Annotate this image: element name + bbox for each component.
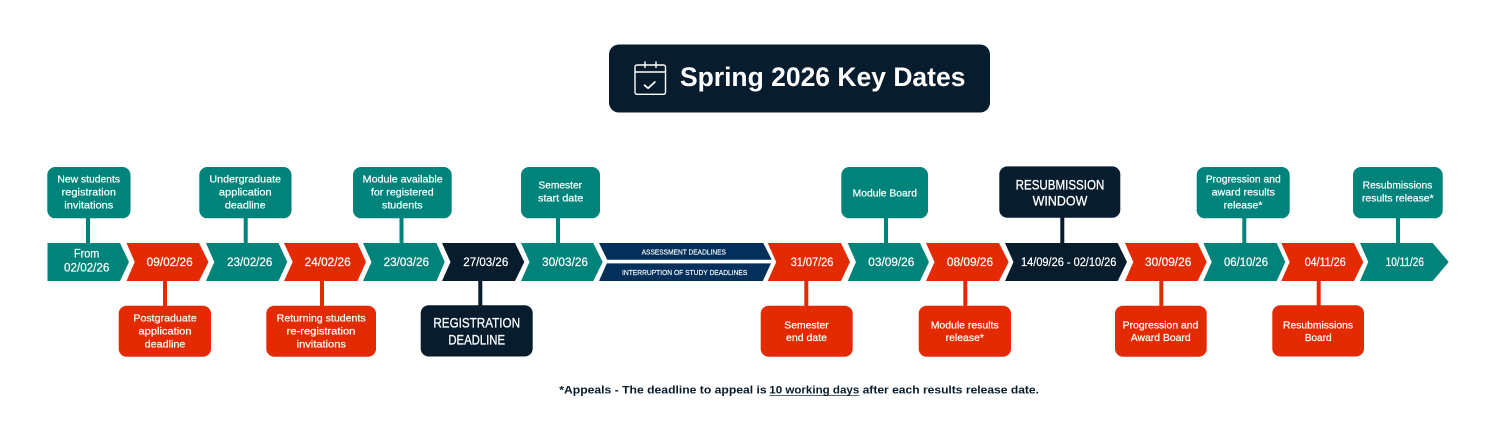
- footnote: appeals deadline: *Appeals - The deadline to appeal is: [559, 384, 767, 396]
- milestone: returning students re-registration invitations: 24/02/26: [305, 257, 351, 269]
- milestone: module results release: Module results: [931, 319, 999, 331]
- milestone: registration deadline: DEADLINE: [448, 331, 505, 347]
- milestone: undergraduate application deadline: deadline: [225, 199, 266, 211]
- milestone: resubmission window: RESUBMISSION: [1016, 176, 1104, 192]
- milestone: semester end date: Semester: [784, 319, 829, 331]
- milestone: undergraduate application deadline: [199, 167, 292, 281]
- assessment and interruption of study deadline bands: [599, 243, 772, 281]
- milestone: postgraduate application deadline: Postgraduate: [133, 313, 197, 325]
- milestone: progression and award board: [1115, 243, 1207, 357]
- milestone: progression and award results release: [1197, 167, 1290, 281]
- milestone: module results release: release*: [946, 332, 984, 344]
- milestone: resubmissions results release: 10/11/26: [1386, 257, 1424, 269]
- milestone: module board: 03/09/26: [868, 257, 914, 269]
- milestone: semester start date: Semester: [538, 180, 583, 192]
- band: interruption of study deadlines: [599, 263, 771, 281]
- milestone: module available for registered students: students: [382, 199, 423, 211]
- milestone: new students registration invitations: invitations: [64, 199, 113, 211]
- milestone: postgraduate application deadline: deadline: [145, 338, 186, 350]
- milestone: resubmissions board: [1272, 243, 1364, 356]
- milestone: resubmissions results release: results release*: [1362, 192, 1434, 204]
- title text: Spring 2026 Key Dates: [680, 62, 965, 92]
- milestone: postgraduate application deadline: [119, 243, 211, 357]
- milestone: module board: [841, 167, 929, 281]
- band: assessment deadlines: ASSESSMENT DEADLINES: [642, 247, 726, 256]
- milestone: resubmissions results release: [1353, 167, 1449, 281]
- milestone: undergraduate application deadline: Undergraduate: [209, 174, 281, 186]
- milestone: semester start date: [521, 167, 603, 281]
- milestone: resubmissions board: Board: [1305, 332, 1332, 344]
- milestone: returning students re-registration invitations: Returning students: [277, 313, 366, 325]
- milestone: registration deadline: [421, 243, 533, 356]
- footnote: appeals deadline: [559, 384, 1039, 396]
- milestone: progression and award results release: release*: [1224, 199, 1262, 211]
- milestone: postgraduate application deadline: application: [138, 326, 192, 338]
- milestone: semester end date: 31/07/26: [791, 257, 833, 269]
- milestone: module available for registered students: for registered: [371, 186, 434, 198]
- milestone: progression and award board: 30/09/26: [1145, 257, 1191, 269]
- title banner: [609, 44, 990, 112]
- milestone: new students registration invitations: [47, 167, 130, 281]
- milestone: resubmission window: 14/09/26 - 02/10/26: [1021, 257, 1116, 269]
- icon: calendar with check mark: [635, 62, 666, 94]
- band: assessment deadlines: [599, 243, 772, 260]
- milestone: progression and award board: Progression and: [1123, 319, 1199, 331]
- milestone: semester start date: 30/03/26: [542, 257, 588, 269]
- milestone: postgraduate application deadline: 09/02/26: [147, 257, 193, 269]
- milestone: semester start date: start date: [538, 193, 584, 205]
- milestone: module available for registered students: 23/03/26: [384, 257, 429, 269]
- milestone: resubmissions results release: Resubmissions: [1363, 180, 1432, 192]
- milestone: undergraduate application deadline: application: [219, 186, 272, 198]
- milestone: progression and award board: Award Board: [1131, 332, 1191, 344]
- milestone: module board: Module Board: [853, 187, 917, 199]
- milestone: returning students re-registration invitations: re-registration: [287, 326, 356, 338]
- milestone: semester end date: [761, 243, 853, 357]
- footnote: appeals deadline: 10 working days: [769, 384, 859, 396]
- milestone: resubmission window: WINDOW: [1033, 193, 1088, 209]
- milestone: returning students re-registration invitations: invitations: [297, 338, 346, 350]
- milestone: new students registration invitations: 02/02/26: [64, 263, 109, 275]
- milestone: module available for registered students: Module available: [363, 174, 443, 186]
- milestone: registration deadline: 27/03/26: [463, 257, 508, 269]
- milestone: module results release: 08/09/26: [947, 257, 993, 269]
- footnote: appeals deadline: after each results release date.: [863, 384, 1039, 396]
- milestone: new students registration invitations: New students: [57, 174, 120, 186]
- milestone: returning students re-registration invitations: [266, 243, 376, 357]
- milestone: registration deadline: REGISTRATION: [433, 314, 520, 330]
- milestone: module results release: [919, 243, 1011, 357]
- milestone: progression and award results release: award results: [1212, 186, 1275, 198]
- milestone: new students registration invitations: From: [74, 249, 99, 261]
- milestone: resubmissions board: 04/11/26: [1305, 257, 1346, 269]
- milestone: module available for registered students: [353, 167, 452, 281]
- band: interruption of study deadlines: INTERRUPTION OF STUDY DEADLINES: [622, 268, 747, 277]
- milestone: undergraduate application deadline: 23/02/26: [227, 257, 272, 269]
- milestone: resubmission window: [999, 166, 1127, 281]
- milestone: semester end date: end date: [786, 332, 827, 344]
- milestone: resubmissions board: Resubmissions: [1283, 319, 1353, 331]
- milestone: new students registration invitations: registration: [62, 186, 116, 198]
- milestone: progression and award results release: Progression and: [1206, 174, 1281, 186]
- milestone: progression and award results release: 06/10/26: [1224, 257, 1268, 269]
